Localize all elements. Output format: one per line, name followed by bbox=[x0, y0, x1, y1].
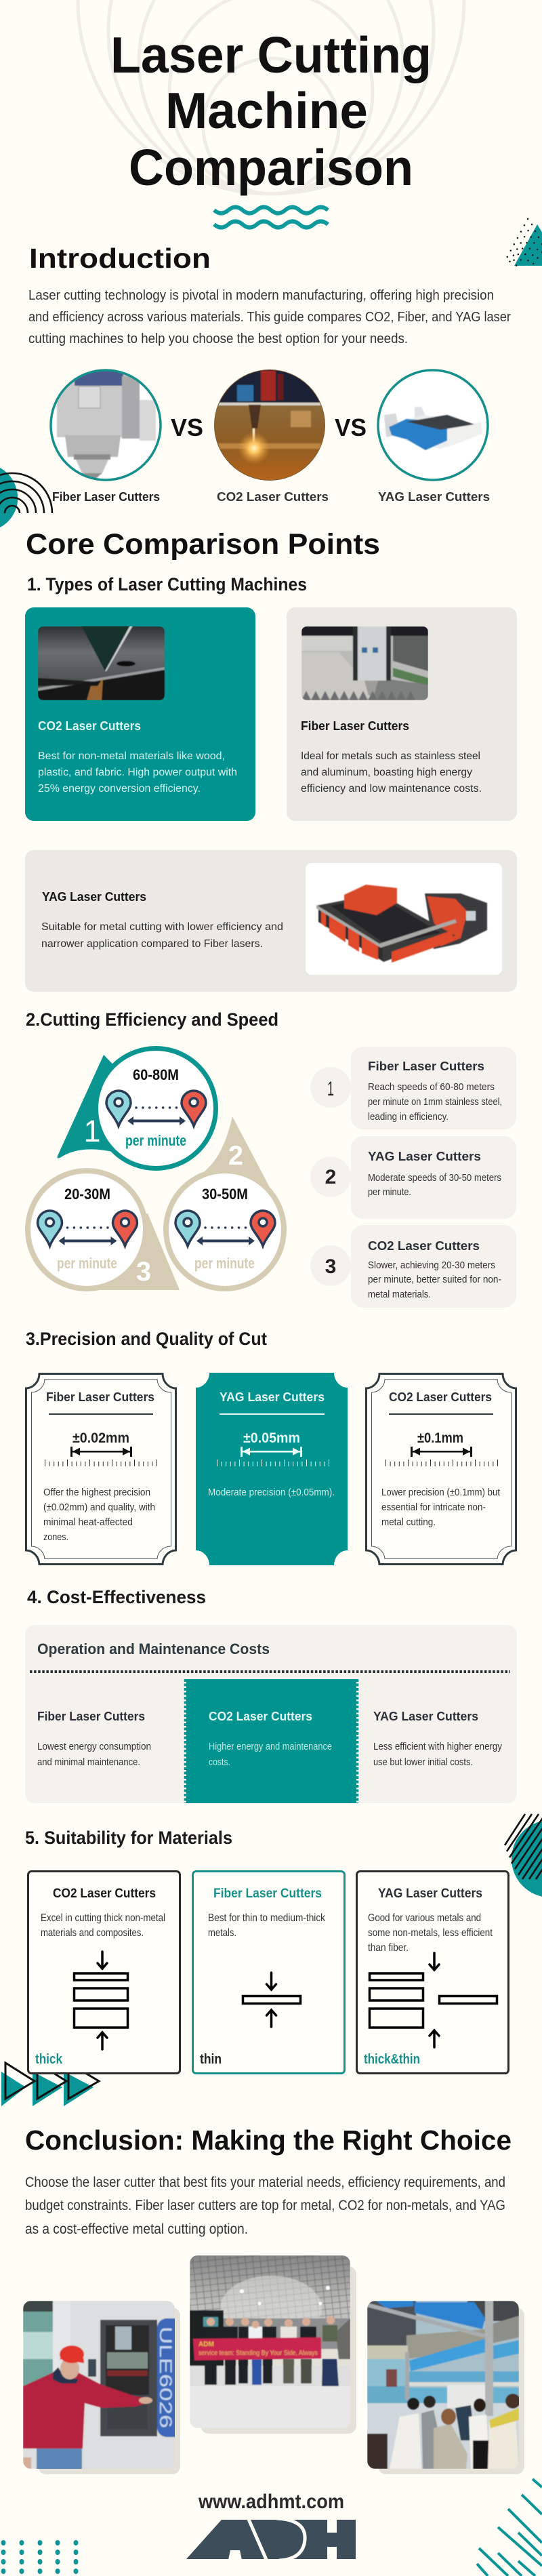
decorative concentric rings behind title bbox=[78, 0, 464, 194]
precision card: fiber: (±0.02mm) and quality, with bbox=[43, 1502, 155, 1513]
material card: CO2 bbox=[28, 1871, 180, 2073]
photo: service team with banner bbox=[190, 2255, 356, 2434]
text: vs: VS bbox=[171, 414, 203, 441]
heading: cost-effectiveness: 4. Cost-Effectiveness bbox=[27, 1587, 206, 1607]
material card: CO2: thick bbox=[35, 2052, 63, 2067]
decorative teal dots bbox=[1, 2540, 79, 2574]
intro paragraph: Laser cutting technology is pivotal in modern manufacturing, offering high precision bbox=[28, 287, 494, 303]
precision card: YAG: YAG Laser Cutters bbox=[220, 1390, 325, 1404]
drop: rank 1 fiber: per minute bbox=[125, 1132, 186, 1149]
conclusion paragraph bbox=[25, 2175, 505, 2237]
precision card: fiber: Offer the highest precision bbox=[43, 1487, 150, 1498]
description: efficiency and low maintenance costs. bbox=[301, 783, 482, 794]
fiber column text: and minimal maintenance. bbox=[37, 1756, 140, 1768]
drop: rank 2 YAG bbox=[166, 1116, 285, 1289]
precision card: fiber: ±0.02mm bbox=[72, 1430, 129, 1446]
labels under circles: CO2 Laser Cutters bbox=[217, 489, 329, 504]
panel title: Operation and Maintenance Costs bbox=[37, 1641, 270, 1657]
heading: cutting efficiency and speed: 2.Cutting Efficiency and Speed bbox=[26, 1009, 278, 1030]
YAG column text bbox=[373, 1710, 502, 1768]
decorative teal triangle with dots bbox=[505, 219, 542, 266]
ADH logo bbox=[186, 2518, 356, 2561]
precision card: CO2: Lower precision (±0.1mm) but bbox=[381, 1487, 501, 1498]
heading: precision and quality of cut: 3.Precision and Quality of Cut bbox=[26, 1329, 267, 1349]
material card: fiber bbox=[192, 1871, 344, 2073]
fiber column text bbox=[37, 1710, 151, 1768]
ranking card 2: YAG: 2 bbox=[325, 1166, 336, 1188]
heading: conclusion: Conclusion: Making the Right Choice bbox=[25, 2125, 512, 2156]
precision card: CO2: CO2 Laser Cutters bbox=[389, 1390, 492, 1404]
labels under circles: YAG Laser Cutters bbox=[378, 489, 490, 504]
precision card: CO2: essential for intricate non- bbox=[381, 1502, 486, 1513]
ranking card 2: YAG: YAG Laser Cutters bbox=[368, 1150, 481, 1163]
image: red YAG machine bbox=[306, 863, 502, 975]
decorative teal waves bbox=[214, 207, 328, 228]
icon: thick material stack bbox=[75, 1952, 127, 2049]
text: vs: VS bbox=[335, 414, 367, 441]
panel: CO2 laser cutters bbox=[25, 607, 255, 821]
material card: fiber: Best for thin to medium-thick bbox=[208, 1912, 325, 1924]
description: 25% energy conversion efficiency. bbox=[38, 783, 201, 794]
fiber column text: Lowest energy consumption bbox=[37, 1741, 151, 1752]
drop: rank 2 YAG: per minute bbox=[194, 1255, 255, 1272]
description: Suitable for metal cutting with lower efficiency and bbox=[41, 921, 283, 933]
ranking card 1: fiber: Reach speeds of 60-80 meters bbox=[368, 1081, 495, 1093]
description bbox=[301, 750, 482, 794]
CO2 column text: Higher energy and maintenance bbox=[209, 1741, 332, 1752]
heading: core comparison points: Core Comparison Points bbox=[26, 528, 380, 561]
image: fiber laser head in circle bbox=[50, 369, 161, 483]
ranking card 1: fiber bbox=[310, 1047, 516, 1129]
intro paragraph: cutting machines to help you choose the best option for your needs. bbox=[28, 331, 408, 346]
material card: YAG: some non-metals, less efficient bbox=[368, 1927, 493, 1939]
panel: YAG laser cutters bbox=[25, 850, 517, 992]
material card: YAG: YAG Laser Cutters bbox=[378, 1887, 482, 1901]
photo: service team with banner: service team: Standing By Your Side, Always bbox=[199, 2350, 318, 2357]
icon: thin material bbox=[243, 1973, 301, 2027]
description bbox=[38, 750, 237, 794]
labels under circles: Fiber Laser Cutters bbox=[52, 489, 160, 504]
ranking card 3: CO2: 3 bbox=[325, 1255, 336, 1278]
precision card: YAG: ±0.05mm bbox=[243, 1430, 300, 1446]
icon: thick and thin material bbox=[370, 1953, 497, 2047]
CO2 column text bbox=[209, 1710, 332, 1768]
conclusion paragraph: as a cost-effective metal cutting option. bbox=[25, 2221, 248, 2237]
precision card: fiber: minimal heat-affected bbox=[43, 1516, 133, 1528]
CO2 teal column bbox=[184, 1679, 358, 1803]
material card: CO2: Excel in cutting thick non-metal bbox=[41, 1912, 165, 1924]
labels under circles bbox=[52, 489, 490, 504]
ranking card 2: YAG: per minute. bbox=[368, 1186, 411, 1198]
fiber column text: Fiber Laser Cutters bbox=[37, 1710, 145, 1723]
material card: CO2: CO2 Laser Cutters bbox=[53, 1887, 156, 1901]
drop: rank 1 fiber bbox=[58, 1048, 215, 1169]
ranking card 1: fiber: per minute on 1mm stainless steel, bbox=[368, 1096, 502, 1108]
drop: rank 3 CO2: per minute bbox=[57, 1255, 117, 1272]
title: Comparison bbox=[129, 139, 413, 196]
precision card: fiber bbox=[26, 1373, 176, 1565]
description: Ideal for metals such as stainless steel bbox=[301, 750, 480, 762]
material card: fiber: metals. bbox=[208, 1927, 236, 1939]
panel: operation and maintenance costs bbox=[25, 1625, 517, 1803]
ranking card 1: fiber: 1 bbox=[327, 1078, 334, 1100]
drop: rank 3 CO2: 3 bbox=[136, 1257, 151, 1287]
YAG column text: Less efficient with higher energy bbox=[373, 1741, 502, 1752]
drop: rank 3 CO2 bbox=[28, 1171, 180, 1290]
drop: rank 3 CO2: 20-30M bbox=[64, 1186, 110, 1203]
description: narrower application compared to Fiber lasers. bbox=[41, 938, 263, 950]
image: CO2 laser cutting in circle bbox=[214, 369, 325, 481]
ranking card 3: CO2: Slower, achieving 20-30 meters bbox=[368, 1260, 495, 1271]
title: Machine bbox=[165, 82, 368, 139]
image: fiber cutting head bbox=[301, 626, 428, 700]
description: Best for non-metal materials like wood, bbox=[38, 750, 225, 762]
description bbox=[41, 921, 283, 950]
ranking card 3: CO2: metal materials. bbox=[368, 1289, 431, 1300]
ranking card 1: fiber: leading in efficiency. bbox=[368, 1111, 449, 1123]
decorative teal circle with hatching bbox=[505, 1814, 542, 1897]
ranking card 2: YAG bbox=[310, 1136, 516, 1219]
material card: fiber: thin bbox=[200, 2052, 222, 2067]
material card: YAG: than fiber. bbox=[368, 1942, 409, 1954]
precision card: CO2: metal cutting. bbox=[381, 1516, 436, 1528]
heading: introduction: Introduction bbox=[29, 243, 211, 274]
material card: YAG bbox=[356, 1871, 508, 2073]
description: and aluminum, boasting high energy bbox=[301, 767, 472, 778]
ranking card 3: CO2: CO2 Laser Cutters bbox=[368, 1239, 480, 1253]
material card: fiber: Fiber Laser Cutters bbox=[213, 1887, 322, 1901]
material card: YAG: Good for various metals and bbox=[368, 1912, 481, 1924]
title: Fiber Laser Cutters bbox=[301, 719, 409, 733]
title bbox=[110, 26, 432, 196]
precision card: YAG: Moderate precision (±0.05mm). bbox=[208, 1487, 335, 1498]
precision card: CO2 bbox=[366, 1373, 516, 1565]
YAG column text: YAG Laser Cutters bbox=[373, 1710, 478, 1723]
decorative teal blob and black arcs bbox=[0, 468, 53, 527]
material card: YAG: thick&thin bbox=[364, 2052, 420, 2067]
drop: rank 2 YAG: 2 bbox=[228, 1141, 243, 1171]
precision card: fiber: Fiber Laser Cutters bbox=[46, 1390, 154, 1404]
title: Laser Cutting bbox=[110, 26, 432, 83]
material card: CO2: materials and composites. bbox=[41, 1927, 144, 1939]
photo: service team with banner: ADM bbox=[199, 2341, 214, 2348]
drop: rank 2 YAG: 30-50M bbox=[202, 1186, 248, 1203]
CO2 column text: costs. bbox=[209, 1756, 230, 1768]
photo: worker at machine: ULE6026 bbox=[156, 2327, 175, 2428]
ranking card 3: CO2: per minute, better suited for non- bbox=[368, 1274, 501, 1285]
title: CO2 Laser Cutters bbox=[38, 719, 141, 733]
website url: www.adhmt.com bbox=[198, 2491, 344, 2513]
drop: rank 1 fiber: 1 bbox=[83, 1114, 101, 1148]
YAG column text: use but lower initial costs. bbox=[373, 1756, 473, 1768]
photo: trade show booth bbox=[367, 2301, 524, 2474]
precision card: CO2: ±0.1mm bbox=[417, 1430, 463, 1446]
ranking card 1: fiber: Fiber Laser Cutters bbox=[368, 1060, 484, 1073]
title: YAG Laser Cutters bbox=[42, 890, 146, 904]
image: YAG machine in circle bbox=[377, 369, 488, 481]
panel: fiber laser cutters bbox=[287, 607, 517, 821]
heading: types of laser cutting machines: 1. Types of Laser Cutting Machines bbox=[27, 574, 307, 595]
CO2 column text: CO2 Laser Cutters bbox=[209, 1710, 312, 1723]
speed drops chart bbox=[28, 1048, 285, 1290]
ranking card 3: CO2 bbox=[310, 1225, 516, 1308]
drop: rank 1 fiber: 60-80M bbox=[133, 1066, 179, 1083]
description: plastic, and fabric. High power output with bbox=[38, 767, 237, 778]
photo: worker at machine bbox=[23, 2301, 184, 2474]
precision card: fiber: zones. bbox=[43, 1531, 68, 1543]
heading: suitability for materials: 5. Suitability for Materials bbox=[25, 1828, 232, 1848]
precision card: YAG bbox=[196, 1373, 348, 1565]
intro paragraph bbox=[28, 287, 511, 346]
image: laser nozzle on plate bbox=[38, 626, 165, 700]
ranking card 2: YAG: Moderate speeds of 30-50 meters bbox=[368, 1172, 501, 1184]
decorative teal diagonal lines bbox=[477, 2479, 542, 2576]
decorative triangles behind cards bbox=[1, 2063, 99, 2106]
